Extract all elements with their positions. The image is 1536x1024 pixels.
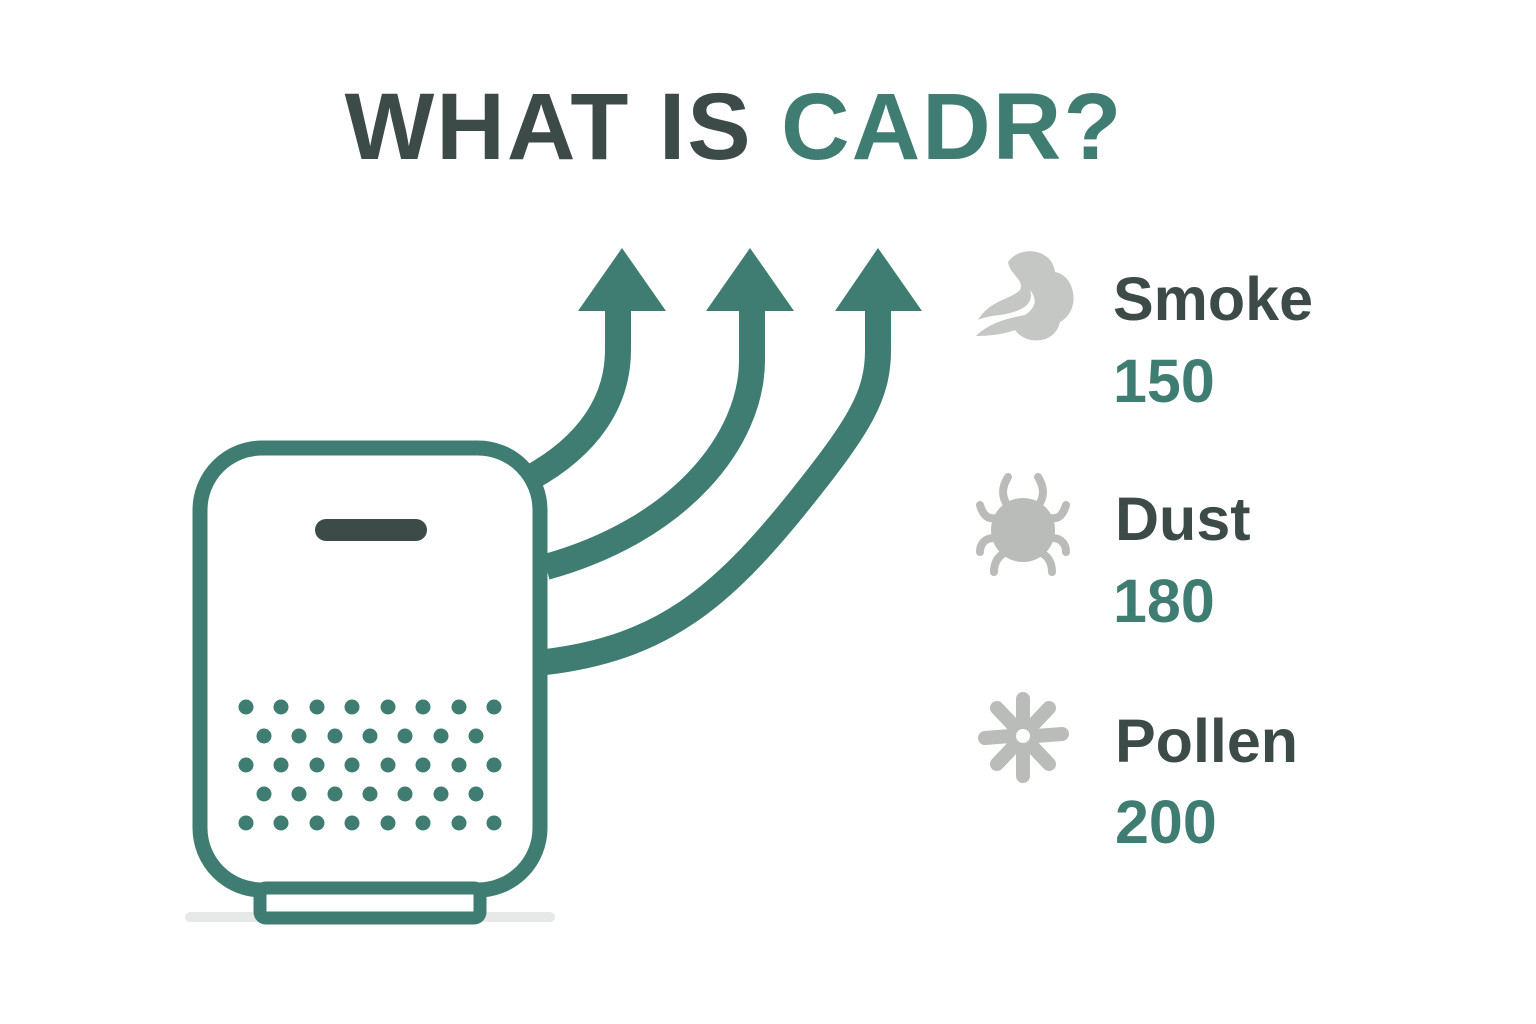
arrow 1 bbox=[530, 248, 666, 478]
icon: pollen bbox=[985, 699, 1062, 776]
arrow 2 bbox=[546, 248, 794, 567]
grille dots bbox=[238, 700, 502, 830]
labels: dust: 180 bbox=[1113, 567, 1215, 635]
shadow under purifier bbox=[185, 912, 555, 922]
labels: dust: Dust bbox=[1115, 485, 1251, 553]
arrows: airflow bbox=[530, 248, 922, 662]
title: WHAT IS CADR? bbox=[345, 74, 1123, 180]
labels: smoke: 150 bbox=[1113, 347, 1215, 415]
icon: air purifier bbox=[200, 448, 540, 918]
arrow 3 bbox=[546, 248, 922, 662]
labels: smoke bbox=[1113, 265, 1313, 415]
labels: smoke: Smoke bbox=[1113, 265, 1313, 333]
base bbox=[260, 888, 480, 918]
labels: pollen: Pollen bbox=[1115, 707, 1298, 775]
labels: dust bbox=[1113, 485, 1251, 635]
icon: dust mite bbox=[980, 477, 1066, 572]
control slot bbox=[315, 519, 427, 541]
labels: pollen: 200 bbox=[1115, 788, 1217, 856]
labels: pollen bbox=[1115, 707, 1298, 856]
icon: smoke bbox=[976, 251, 1074, 340]
